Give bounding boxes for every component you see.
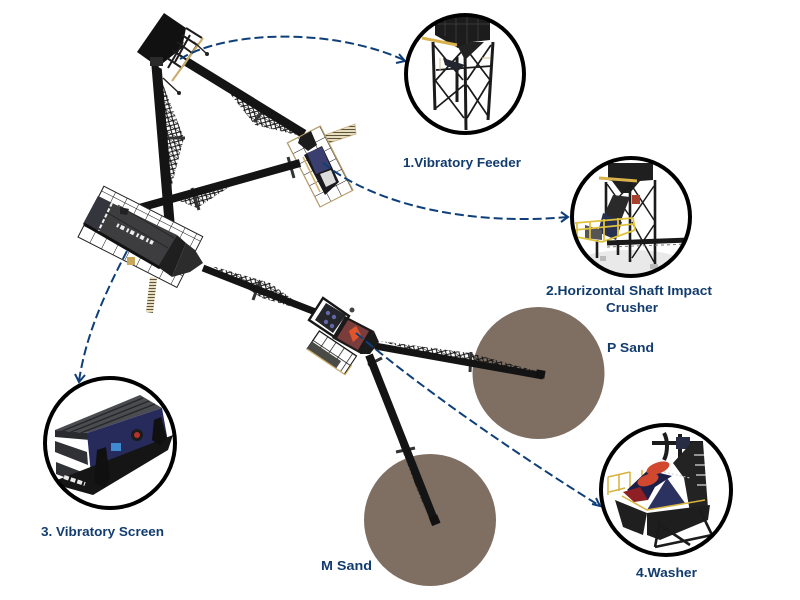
label: horizontal shaft impact crusher: Crusher — [606, 300, 658, 315]
P sand discharge head — [535, 369, 546, 379]
label: vibratory feeder: 1.Vibratory Feeder — [403, 155, 521, 170]
arrow: to washer — [356, 333, 600, 506]
inset: horizontal shaft impact crusher — [572, 158, 690, 276]
conveyor: crusher to screen — [125, 163, 300, 212]
conveyor trusses — [162, 82, 540, 510]
horizontal shaft impact crusher top view — [287, 124, 356, 207]
inset: vibratory feeder — [406, 12, 524, 133]
conveyor: screen return — [156, 60, 170, 228]
vibratory screen top view — [78, 186, 203, 313]
label: vibratory screen: 3. Vibratory Screen — [41, 524, 164, 539]
conveyor: screen to washer — [203, 268, 318, 313]
label: P Sand: P Sand — [607, 340, 654, 355]
vibratory feeder top view — [137, 13, 209, 95]
conveyor: P sand — [375, 346, 543, 376]
conveyor: feeder to crusher — [187, 62, 304, 134]
M Sand stockpile — [364, 454, 496, 586]
inset: washer — [601, 425, 731, 555]
arrow: to crusher — [323, 163, 568, 222]
label: M Sand: M Sand — [321, 558, 372, 573]
conveyor: M sand — [369, 355, 435, 522]
M sand discharge head — [429, 514, 441, 526]
label: horizontal shaft impact crusher: 2.Horizontal Shaft Impact — [546, 283, 713, 298]
P Sand stockpile — [472, 307, 604, 439]
arrow: to vibratory screen — [75, 251, 127, 382]
washer top view — [307, 298, 379, 375]
arrow: to vibratory feeder — [180, 37, 405, 63]
inset: vibratory screen — [45, 378, 175, 508]
label: washer: 4.Washer — [636, 565, 697, 580]
